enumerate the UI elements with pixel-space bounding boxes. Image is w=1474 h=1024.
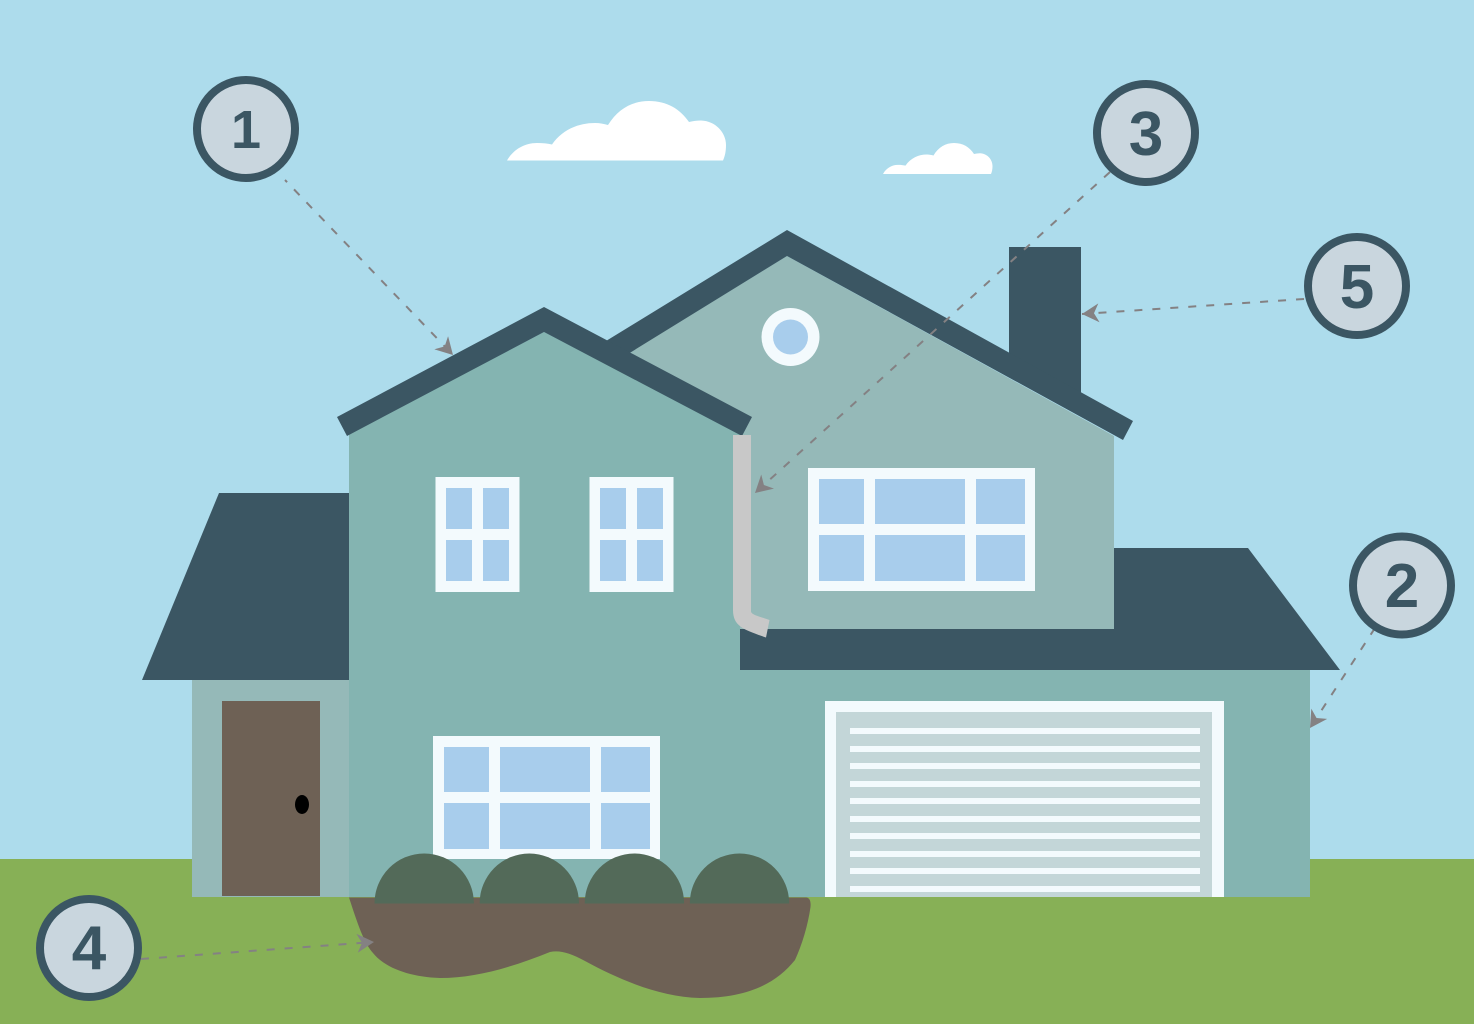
arrow 5 <box>1082 299 1304 314</box>
callout 5 <box>1308 237 1406 335</box>
arrow 4 <box>141 942 374 959</box>
lower window <box>433 736 660 859</box>
upper right window <box>808 468 1035 591</box>
cloud left <box>507 101 726 160</box>
garage door <box>825 701 1224 897</box>
porch roof <box>142 493 350 680</box>
chimney <box>1009 247 1081 405</box>
shrubs <box>374 854 789 904</box>
callout 3 <box>1097 84 1195 182</box>
callout 4 <box>40 899 138 997</box>
callout 1: 1 <box>231 100 261 160</box>
upper left window 2 <box>590 477 674 592</box>
callout 1 <box>197 80 295 178</box>
round attic window <box>762 308 820 366</box>
front door <box>222 701 320 896</box>
porch wall <box>192 670 350 897</box>
downspout <box>733 435 770 638</box>
callout 3: 3 <box>1129 100 1163 169</box>
mulch bed <box>349 898 811 998</box>
arrow 2 <box>1310 628 1375 728</box>
upper left window 1 <box>436 477 520 592</box>
upper right roof <box>606 230 1133 440</box>
arrow 1 <box>285 180 453 355</box>
callout 4: 4 <box>72 914 107 983</box>
garage roof <box>740 548 1340 670</box>
cloud right <box>883 143 992 174</box>
arrow 3 <box>755 172 1110 493</box>
lawn <box>0 859 1474 1024</box>
callout 2 <box>1353 536 1451 634</box>
main house wall <box>349 332 1310 897</box>
callout 5: 5 <box>1340 253 1374 322</box>
upper right wing wall <box>630 256 1114 629</box>
door knob <box>295 795 309 814</box>
main gable roof <box>337 307 752 436</box>
callout 2: 2 <box>1385 552 1419 621</box>
